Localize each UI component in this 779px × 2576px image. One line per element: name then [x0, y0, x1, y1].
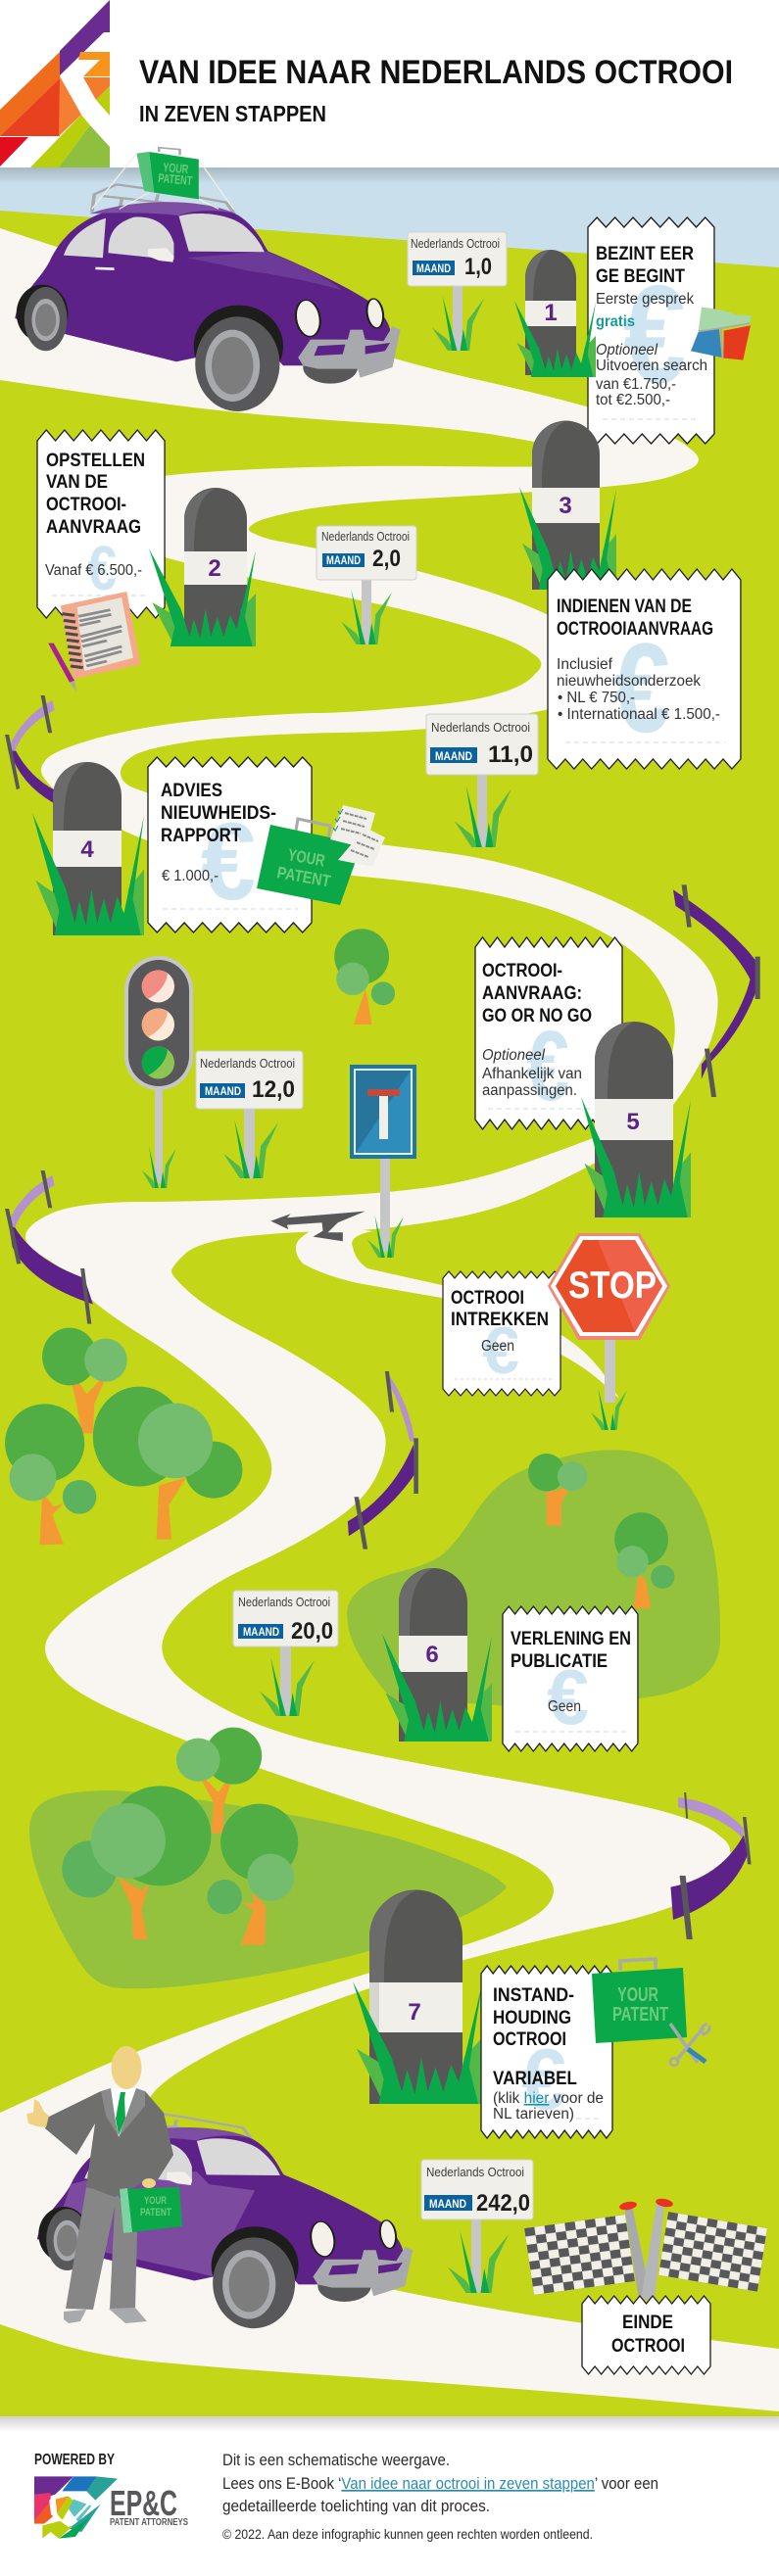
icon: patent case with documents	[257, 805, 385, 905]
milestone 6: 6	[425, 1642, 439, 1668]
receipt: advies nieuwheidsrapport: €	[201, 800, 256, 923]
receipt: verlening en publicatie: VERLENING EN	[511, 1629, 631, 1649]
milestone 3: 3	[559, 493, 572, 519]
receipt: go or no go: Afhankelijk van	[482, 1066, 582, 1082]
icon: patent case with tools	[592, 1959, 709, 2066]
milestone 2	[149, 488, 256, 646]
footer disclaimer text: Lees ons E-Book ‘Van idee naar octrooi in zeven stappen’ voor een	[222, 2474, 658, 2493]
receipt: instandhouding octrooi: NL tarieven)	[493, 2106, 574, 2123]
powered by label: POWERED BY	[34, 2452, 115, 2468]
finish flags	[524, 2197, 767, 2300]
footer disclaimer text: © 2022. Aan deze infographic kunnen geen rechten worden ontleend.	[222, 2526, 593, 2542]
receipt: bezint eer ge begint	[588, 217, 714, 444]
man with patent case: PATENT	[140, 2207, 171, 2218]
sign: maand 11,0: Nederlands Octrooi	[431, 720, 530, 735]
EP&C logo mark	[34, 2476, 118, 2539]
receipt: verlening en publicatie	[503, 1606, 638, 1751]
trees centre	[334, 929, 395, 1025]
milestone 4	[32, 762, 144, 935]
receipt: bezint eer ge begint: Eerste gesprek	[596, 291, 694, 308]
hill patch right	[347, 1450, 720, 1707]
receipt: go or no go: €	[526, 1012, 569, 1121]
receipt: instandhouding octrooi: INSTAND-	[493, 1985, 574, 2006]
receipt: indienen van de octrooiaanvraag: OCTROOIAANVRAAG	[557, 619, 713, 640]
receipt: opstellen van de octrooiaanvraag	[37, 430, 165, 618]
car with patent case on roof: YOUR	[163, 160, 189, 176]
receipt: bezint eer ge begint: BEZINT EER	[596, 244, 694, 264]
footer disclaimer text	[222, 2451, 658, 2542]
receipt: verlening en publicatie: €	[547, 1653, 589, 1741]
icon: folded map	[691, 307, 752, 360]
receipt: indienen van de octrooiaanvraag: • Internationaal € 1.500,-	[558, 706, 720, 723]
icon: patent case with documents: PATENT	[275, 863, 332, 891]
milestone 7	[353, 1889, 482, 2104]
barrier 2	[673, 884, 760, 1097]
sign: maand 1,0: Nederlands Octrooi	[411, 236, 500, 251]
icon: patent case with documents: YOUR	[286, 845, 326, 871]
sign: maand 242,0: Nederlands Octrooi	[426, 2165, 524, 2179]
milestone 7: 7	[408, 1999, 421, 2026]
icon: patent case with tools: YOUR	[617, 1984, 658, 2006]
receipt: go or no go: OCTROOI-	[482, 961, 562, 981]
receipt: bezint eer ge begint: Uitvoeren search	[596, 358, 707, 374]
receipt: indienen van de octrooiaanvraag: Inclusief	[557, 656, 613, 673]
milestone 5	[581, 1022, 691, 1217]
receipt: advies nieuwheidsrapport: RAPPORT	[161, 826, 241, 846]
receipt: bezint eer ge begint: Optioneel	[596, 342, 658, 358]
hill patch left	[29, 1790, 507, 1988]
receipt: einde octrooi	[582, 2296, 710, 2374]
receipt: opstellen van de octrooiaanvraag: OPSTELLEN	[46, 451, 145, 471]
sign: maand 2,0	[316, 526, 416, 644]
sign: maand 12,0: Nederlands Octrooi	[200, 1056, 295, 1071]
receipt: instandhouding octrooi	[481, 1966, 612, 2138]
receipt: octrooi intrekken: INTREKKEN	[451, 1310, 549, 1330]
receipt: opstellen van de octrooiaanvraag: €	[87, 533, 117, 603]
receipt: einde octrooi: OCTROOI	[611, 2336, 685, 2357]
receipt: opstellen van de octrooiaanvraag: AANVRAAG	[46, 517, 141, 538]
sign: maand 11,0	[426, 714, 538, 847]
sign: maand 242,0	[421, 2160, 533, 2293]
milestone 6	[382, 1568, 492, 1741]
receipt: verlening en publicatie: PUBLICATIE	[511, 1651, 608, 1672]
receipt: indienen van de octrooiaanvraag: INDIENEN VAN DE	[557, 596, 692, 617]
EP&C wordmark: EP&C	[110, 2483, 177, 2523]
receipt: advies nieuwheidsrapport: € 1.000,-	[162, 868, 219, 884]
tree group left	[5, 1328, 242, 1545]
traffic light	[124, 956, 193, 1188]
footer disclaimer text: gedetailleerde toelichting van dit proces.	[222, 2497, 490, 2515]
car with patent case on roof: PATENT	[158, 170, 193, 188]
receipt: opstellen van de octrooiaanvraag: Vanaf € 6.500,-	[45, 562, 142, 579]
sign: maand 1,0: 1,0	[464, 254, 492, 280]
receipt: go or no go: Optioneel	[482, 1047, 546, 1064]
sign: maand 2,0: MAAND	[326, 553, 361, 567]
receipt: bezint eer ge begint: €	[623, 257, 686, 412]
receipt: instandhouding octrooi: OCTROOI	[493, 2029, 566, 2050]
receipt: indienen van de octrooiaanvraag: • NL € 750,-	[558, 690, 635, 706]
receipt: opstellen van de octrooiaanvraag: VAN DE	[46, 472, 108, 493]
sign: maand 11,0: MAAND	[435, 749, 472, 763]
sign: maand 2,0: 2,0	[372, 546, 401, 572]
subtitle: IN ZEVEN STAPPEN	[139, 101, 326, 126]
milestone 2: 2	[208, 555, 221, 582]
sign: maand 20,0	[233, 1591, 338, 1716]
receipt: go or no go: GO OR NO GO	[482, 1006, 592, 1026]
barrier 1	[5, 695, 55, 803]
receipt: go or no go: AANVRAAG:	[482, 983, 582, 1004]
sign: maand 2,0: Nederlands Octrooi	[321, 529, 410, 544]
icon: notebook and pen	[48, 592, 140, 692]
receipt: go or no go: aanpassingen.	[482, 1082, 577, 1099]
receipt: bezint eer ge begint: van €1.750,-	[596, 376, 676, 393]
receipt: opstellen van de octrooiaanvraag: OCTROOI-	[46, 495, 126, 515]
receipt: octrooi intrekken	[443, 1271, 560, 1396]
barrier 3	[5, 1170, 93, 1324]
receipt: advies nieuwheidsrapport: NIEUWHEIDS-	[161, 803, 276, 824]
stop sign: STOP	[568, 1264, 657, 1307]
receipt: bezint eer ge begint: gratis	[596, 313, 635, 330]
barrier 4	[348, 1371, 418, 1550]
receipt: einde octrooi: EINDE	[622, 2313, 673, 2333]
sign: maand 1,0	[408, 232, 507, 351]
sign: maand 12,0: MAAND	[205, 1084, 241, 1098]
receipt: instandhouding octrooi: VARIABEL	[493, 2069, 577, 2089]
stop sign	[548, 1233, 670, 1430]
man with patent case	[26, 2046, 182, 2323]
footer panel	[0, 2416, 779, 2576]
car at destination	[37, 2111, 413, 2328]
sign: maand 20,0: MAAND	[243, 1625, 279, 1639]
receipt: advies nieuwheidsrapport: ADVIES	[161, 781, 222, 801]
sign: maand 12,0	[196, 1051, 303, 1178]
receipt: bezint eer ge begint: GE BEGINT	[596, 266, 685, 287]
footer disclaimer text: Dit is een schematische weergave.	[222, 2451, 450, 2469]
sign: maand 1,0: MAAND	[416, 262, 451, 275]
receipt: go or no go	[475, 937, 622, 1129]
receipt: octrooi intrekken: OCTROOI	[451, 1288, 524, 1309]
road fork arrow	[270, 1212, 365, 1241]
car with patent case on roof	[15, 148, 401, 411]
header shadow	[0, 167, 779, 184]
icon: patent case with tools: PATENT	[612, 2004, 668, 2026]
sign: maand 11,0: 11,0	[488, 741, 533, 768]
patent attorneys label: PATENT ATTORNEYS	[110, 2517, 188, 2528]
trees on left hill	[62, 1728, 298, 1945]
man with patent case: YOUR	[144, 2195, 167, 2207]
dead-end road sign	[350, 1065, 416, 1258]
sign: maand 242,0: 242,0	[476, 2190, 530, 2217]
barrier 5	[670, 1792, 752, 1939]
trees on right hill	[528, 1454, 675, 1608]
sign: maand 242,0: MAAND	[429, 2197, 466, 2211]
milestone 5: 5	[626, 1109, 640, 1135]
sky	[0, 167, 779, 422]
receipt: octrooi intrekken: Geen	[481, 1338, 514, 1355]
receipt: octrooi intrekken: €	[482, 1313, 519, 1388]
receipt: bezint eer ge begint: tot €2.500,-	[596, 392, 670, 408]
receipt: advies nieuwheidsrapport	[148, 757, 312, 932]
header logo mark	[0, 0, 110, 167]
receipt: verlening en publicatie: Geen	[548, 1698, 581, 1715]
receipt: indienen van de octrooiaanvraag: €	[613, 616, 670, 759]
receipt: indienen van de octrooiaanvraag: nieuwheidsonderzoek	[557, 673, 701, 690]
milestone 1	[514, 250, 596, 377]
milestone 3	[519, 421, 616, 590]
receipt: instandhouding octrooi: HOUDING	[493, 2008, 571, 2028]
receipt: indienen van de octrooiaanvraag	[548, 569, 741, 769]
footer shadow	[0, 2416, 779, 2432]
receipt: instandhouding octrooi: €	[521, 2030, 566, 2127]
milestone 4: 4	[80, 836, 94, 863]
sign: maand 12,0: 12,0	[252, 1076, 295, 1103]
sign: maand 20,0: 20,0	[291, 1618, 333, 1645]
sign: maand 20,0: Nederlands Octrooi	[238, 1595, 330, 1609]
milestone 1: 1	[544, 300, 558, 326]
receipt: instandhouding octrooi: (klik hier voor de	[493, 2090, 604, 2107]
